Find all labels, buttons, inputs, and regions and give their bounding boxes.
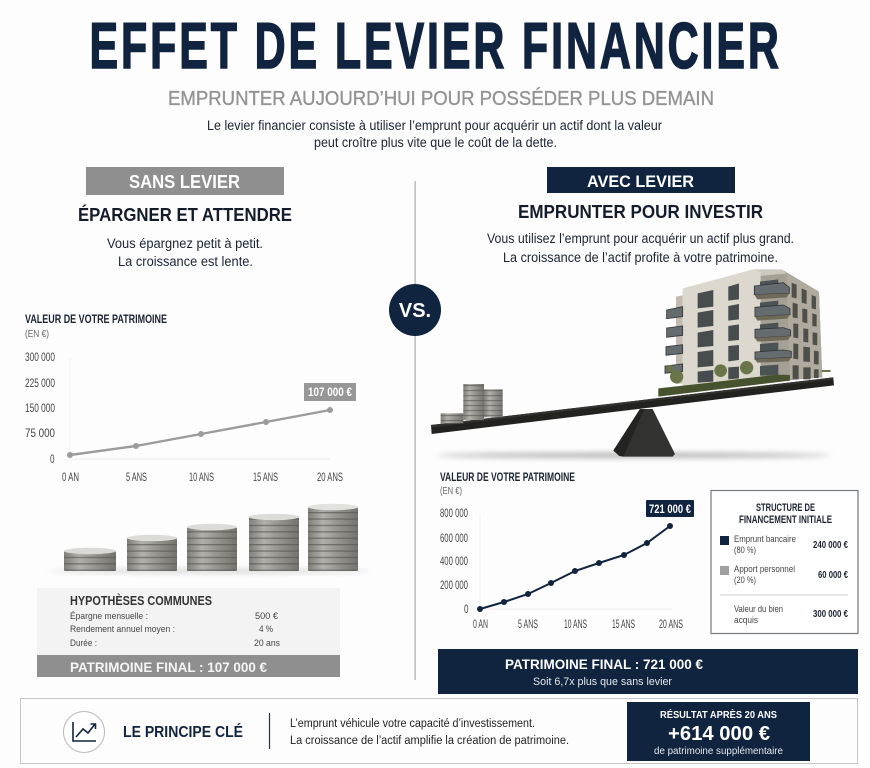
panel: le principe clé: La croissance de l’actif amplifie la création de patrimoine.: [290, 735, 569, 747]
line chart: avec levier: 0 AN: [473, 619, 488, 631]
panel: le principe clé: [20, 698, 858, 764]
final value bar: avec levier: PATRIMOINE FINAL : 721 000 €: [505, 656, 703, 672]
final value bar: sans levier: PATRIMOINE FINAL : 107 000 €: [70, 659, 267, 675]
panel: sans levier heading: La croissance est lente.: [118, 254, 253, 269]
line chart: avec levier: (EN €): [440, 486, 462, 497]
panel: le principe clé: LE PRINCIPE CLÉ: [123, 722, 243, 741]
line chart: sans levier: 10 ANS: [189, 472, 214, 484]
line chart: avec levier: 800 000: [440, 508, 468, 520]
panel: structure de financement: 300 000 €: [813, 608, 848, 620]
line chart: sans levier: 5 ANS: [126, 472, 147, 484]
panel: hypothèses communes: [37, 588, 340, 655]
intro text: Le levier financier consiste à utiliser l’emprunt pour acquérir un actif dont la valeur: [207, 118, 662, 133]
beam: [431, 377, 834, 434]
vs badge: [389, 284, 441, 336]
final value bar: avec levier: Soit 6,7x plus que sans levier: [533, 676, 672, 688]
panel: hypothèses communes: Épargne mensuelle :: [70, 611, 148, 622]
panel: hypothèses communes: 4 %: [259, 624, 273, 635]
panel: le principe clé: L’emprunt véhicule votre capacité d’investissement.: [290, 718, 535, 730]
line chart: avec levier: 721 000 €: [649, 504, 691, 516]
line chart: sans levier: 225 000: [25, 378, 55, 390]
line chart: sans levier: VALEUR DE VOTRE PATRIMOINE: [25, 312, 167, 326]
line chart: sans levier: 15 ANS: [253, 472, 278, 484]
panel: avec levier heading: La croissance de l’actif profite à votre patrimoine.: [503, 250, 778, 265]
panel: structure de financement: (80 %): [734, 545, 756, 556]
line chart: sans levier: (EN €): [25, 329, 49, 340]
line chart: avec levier: 5 ANS: [518, 619, 538, 631]
panel: structure de financement: FINANCEMENT INITIALE: [739, 514, 832, 526]
panel: structure de financement: acquis: [734, 615, 758, 626]
line chart: sans levier: 300 000: [25, 352, 55, 364]
line chart: avec levier: 400 000: [440, 556, 468, 568]
intro text: peut croître plus vite que le coût de la dette.: [314, 135, 557, 150]
panel: hypothèses communes: HYPOTHÈSES COMMUNES: [70, 593, 212, 608]
panel: structure de financement: Valeur du bien: [734, 604, 783, 615]
panel: sans levier heading: [78, 167, 292, 269]
panel: structure de financement: [711, 490, 858, 634]
panel: hypothèses communes: Rendement annuel moyen :: [70, 624, 175, 635]
callout: résultat: +614 000 €: [668, 723, 770, 745]
panel: structure de financement: Apport personnel: [734, 564, 795, 575]
title: EFFET DE LEVIER FINANCIER: [90, 9, 782, 82]
line chart: avec levier: 600 000: [440, 533, 468, 545]
panel: sans levier heading: ÉPARGNER ET ATTENDRE: [78, 204, 292, 225]
callout: résultat: [627, 702, 810, 761]
panel: structure de financement: (20 %): [734, 575, 756, 586]
coin stacks illustration: [50, 504, 370, 573]
subtitle: EMPRUNTER AUJOURD’HUI POUR POSSÉDER PLUS DEMAIN: [168, 87, 714, 110]
panel: structure de financement: Emprunt bancaire: [734, 534, 796, 545]
fulcrum: [613, 409, 675, 457]
illustration: lever with building and coins: [431, 269, 834, 458]
panel: structure de financement: 60 000 €: [818, 569, 848, 581]
panel: avec levier heading: AVEC LEVIER: [587, 172, 694, 191]
panel: avec levier heading: Vous utilisez l’emprunt pour acquérir un actif plus grand.: [487, 231, 794, 246]
intro text: [207, 118, 662, 150]
line chart: sans levier: 75 000: [25, 428, 55, 440]
icon: growth chart: [64, 712, 104, 752]
panel: sans levier heading: SANS LEVIER: [129, 172, 240, 192]
line chart: avec levier: 0: [464, 604, 468, 616]
panel: structure de financement: 240 000 €: [813, 539, 848, 551]
line chart: avec levier: 20 ANS: [659, 619, 683, 631]
line chart: avec levier: 15 ANS: [612, 619, 635, 631]
line chart: avec levier: 10 ANS: [564, 619, 587, 631]
line chart: sans levier: 107 000 €: [308, 387, 353, 399]
line chart: avec levier: 200 000: [440, 580, 468, 592]
vs badge: VS.: [399, 300, 431, 322]
line chart: sans levier: 20 ANS: [317, 472, 343, 484]
panel: hypothèses communes: Durée :: [70, 638, 97, 649]
callout: résultat: RÉSULTAT APRÈS 20 ANS: [660, 708, 777, 721]
panel: structure de financement: STRUCTURE DE: [756, 502, 815, 514]
small coin stacks: [441, 413, 463, 423]
panel: hypothèses communes: 20 ans: [254, 638, 280, 649]
line chart: avec levier: [440, 470, 694, 631]
line chart: sans levier: 150 000: [25, 403, 55, 415]
line chart: avec levier: VALEUR DE VOTRE PATRIMOINE: [440, 470, 575, 484]
line chart: sans levier: [25, 312, 356, 484]
line chart: sans levier: 0 AN: [62, 472, 79, 484]
center divider: [414, 181, 416, 680]
line chart: sans levier: 0: [50, 454, 54, 466]
panel: avec levier heading: EMPRUNTER POUR INVESTIR: [518, 202, 763, 222]
final value bar: avec levier: [438, 649, 858, 694]
panel: hypothèses communes: 500 €: [255, 611, 279, 622]
panel: sans levier heading: Vous épargnez petit à petit.: [107, 236, 263, 251]
panel: avec levier heading: [487, 167, 794, 265]
callout: résultat: de patrimoine supplémentaire: [654, 746, 783, 757]
final value bar: sans levier: [37, 655, 340, 677]
